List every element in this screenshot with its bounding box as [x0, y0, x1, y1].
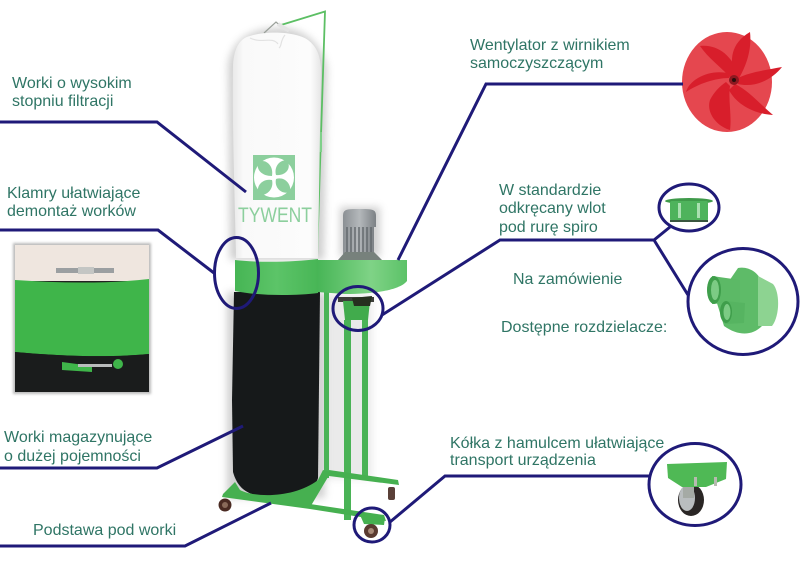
label: inlet: W standardzie [499, 182, 601, 199]
label: on order: Na zamówienie [513, 271, 622, 288]
logo: fan [253, 155, 295, 200]
label: splitters: Dostępne rozdzielacze: [501, 319, 667, 336]
label: inlet: odkręcany wlot [499, 200, 606, 217]
frame legs [324, 292, 368, 520]
caster detail [667, 462, 727, 516]
callout: storage bags leader [0, 426, 243, 468]
label: clamps: demontaż worków [7, 203, 136, 220]
splitter part [707, 268, 778, 334]
callout: casters leader and circles [354, 444, 741, 542]
callout: clamps leader [0, 230, 214, 273]
callout: base leader [0, 503, 271, 546]
callout: inlet leader and circles [333, 184, 798, 354]
cyclone housing [317, 260, 407, 294]
fan impeller [682, 32, 782, 132]
callout: filter bags leader [0, 122, 246, 192]
logo: TYWENT wordmark: TYWENT [238, 204, 312, 227]
label: storage bags: Worki magazynujące [4, 429, 152, 446]
label: casters: transport urządzenia [450, 452, 596, 469]
callout: fan leader [398, 84, 683, 260]
machine: dust collector [218, 12, 407, 538]
label: fan: Wentylator z wirnikiem [470, 37, 630, 54]
base frame [222, 470, 399, 521]
casters [218, 487, 395, 538]
label: filter bags: Worki o wysokim [12, 75, 132, 92]
spiro inlet part [665, 198, 713, 222]
inlet flange [338, 296, 374, 320]
label: clamps: Klamry ułatwiające [7, 185, 140, 202]
label: filter bags: stopniu filtracji [12, 93, 113, 110]
label: inlet: pod rurę spiro [499, 219, 598, 236]
motor [338, 209, 382, 260]
filter bag support rod [264, 12, 325, 258]
label: base: Podstawa pod worki [33, 522, 176, 539]
storage bag [232, 292, 320, 497]
callout: clamps circle [214, 238, 258, 308]
soft shadows [227, 28, 380, 498]
label: storage bags: o dużej pojemności [4, 448, 141, 465]
label: fan: samoczyszczącym [470, 55, 603, 72]
label: casters: Kółka z hamulcem ułatwiające [450, 435, 664, 452]
filter bag [233, 33, 321, 258]
green band [235, 259, 318, 295]
inset photo: bag clamps [13, 243, 151, 394]
